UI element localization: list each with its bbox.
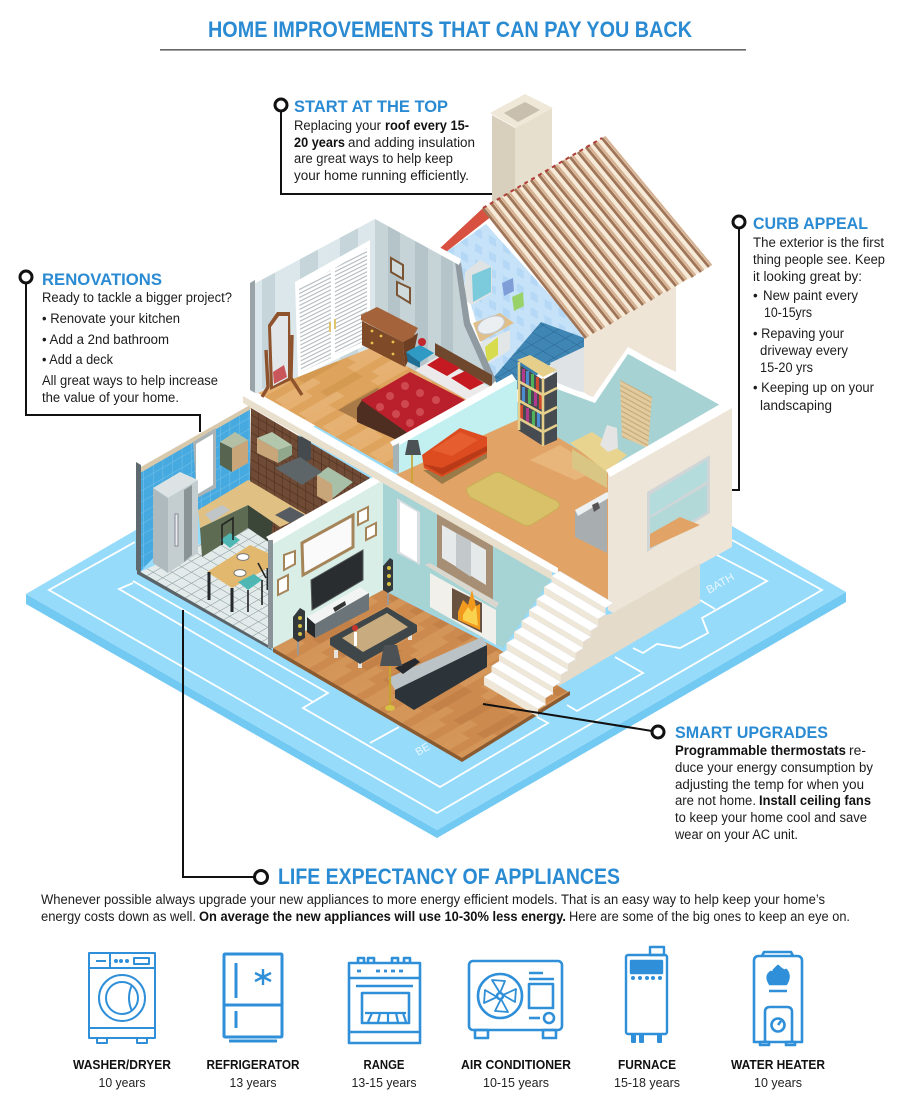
appliance: washer/dryer xyxy=(73,953,171,1090)
lower wall under upper floor xyxy=(530,563,700,700)
intro paragraph: energy costs down as well. xyxy=(41,909,196,924)
living walls xyxy=(380,478,552,648)
callout: curb appeal: thing people see. Keep xyxy=(753,252,885,267)
callout: smart upgrades xyxy=(483,704,873,842)
fridge xyxy=(153,472,198,573)
callout: renovations xyxy=(20,270,232,432)
sofa xyxy=(388,637,487,710)
appliance: water heater: 10 years xyxy=(754,1076,802,1090)
appliance: air conditioner: AIR CONDITIONER xyxy=(461,1058,571,1072)
callout: curb appeal: The exterior is the first xyxy=(753,235,884,250)
bedroom floor xyxy=(258,347,493,472)
red gable xyxy=(438,208,492,252)
blueprint slab xyxy=(26,355,846,838)
dresser xyxy=(361,307,418,367)
icon: range xyxy=(349,958,420,1043)
icon: washer xyxy=(89,953,155,1043)
exterior wall xyxy=(606,403,734,613)
appliance: range: 13-15 years xyxy=(352,1076,416,1090)
nightstand xyxy=(406,338,434,368)
callout: curb appeal: 15-20 yrs xyxy=(760,360,813,375)
appliance: refrigerator xyxy=(206,954,300,1090)
cream dresser xyxy=(570,425,627,488)
icon: water heater xyxy=(754,952,802,1045)
section heading: life expectancy: LIFE EXPECTANCY OF APPLIANCES xyxy=(278,864,620,889)
chimney xyxy=(490,94,553,215)
callout: curb appeal: CURB APPEAL xyxy=(753,214,868,233)
blueprint slab: BATH xyxy=(704,571,737,597)
roof xyxy=(483,136,711,338)
TV stand xyxy=(307,587,369,638)
window blind xyxy=(620,380,652,448)
callout: start at the top: your home running efficiently. xyxy=(294,168,469,183)
floor lamp xyxy=(405,440,421,483)
section heading: life expectancy xyxy=(183,610,620,889)
callout: start at the top: 20 years xyxy=(294,135,345,150)
callout: curb appeal: • Repaving your xyxy=(753,326,844,341)
appliance: furnace xyxy=(614,947,680,1090)
icon: refrigerator xyxy=(224,954,282,1041)
callout: start at the top xyxy=(275,97,492,194)
appliance: refrigerator: 13 years xyxy=(230,1076,276,1090)
red sofa xyxy=(422,428,487,484)
callout: smart upgrades: re- xyxy=(849,743,866,758)
bathroom xyxy=(446,224,590,395)
dining table xyxy=(207,518,268,612)
appliance: range xyxy=(349,958,420,1090)
lamp xyxy=(380,645,402,711)
intro paragraph xyxy=(41,892,850,924)
mirror xyxy=(262,312,302,397)
callout: renovations: RENOVATIONS xyxy=(42,270,162,289)
callout: start at the top: START AT THE TOP xyxy=(294,97,448,116)
callout: curb appeal: • xyxy=(753,288,758,303)
appliance: washer/dryer: 10 years xyxy=(98,1076,146,1090)
callout: renovations: • Renovate your kitchen xyxy=(42,311,180,326)
appliance: washer/dryer: WASHER/DRYER xyxy=(73,1058,171,1072)
TV xyxy=(311,550,363,612)
wall art xyxy=(278,507,376,595)
yellow rug xyxy=(466,472,560,526)
callout: start at the top: are great ways to help keep xyxy=(294,151,453,166)
callout: smart upgrades: Programmable thermostats xyxy=(675,743,846,758)
callout: smart upgrades: duce your energy consumption by xyxy=(675,760,873,775)
wall cabinet xyxy=(220,432,248,472)
callout: start at the top: Replacing your xyxy=(294,118,381,133)
kitchen window xyxy=(193,428,216,498)
callout: curb appeal: 10-15yrs xyxy=(764,305,812,320)
callout: curb appeal: it looking great by: xyxy=(753,269,862,284)
staircase xyxy=(484,571,614,717)
callout: curb appeal: driveway every xyxy=(760,343,848,358)
closet xyxy=(295,240,370,378)
callout: curb appeal: New paint every xyxy=(763,288,858,303)
callout: renovations: All great ways to help increase xyxy=(42,373,218,388)
intro paragraph: On average the new appliances will use 10-30% less energy. xyxy=(199,909,566,924)
appliance: furnace: 15-18 years xyxy=(614,1076,680,1090)
callout: start at the top: roof every 15- xyxy=(385,118,469,133)
appliance: refrigerator: REFRIGERATOR xyxy=(206,1058,300,1072)
counter xyxy=(198,480,307,557)
callout: renovations: Ready to tackle a bigger project? xyxy=(42,290,232,305)
intro paragraph: Whenever possible always upgrade your new appliances to more energy efficient models. That is an easy way to help keep your home’s xyxy=(41,892,825,907)
appliance: air conditioner: 10-15 years xyxy=(483,1076,549,1090)
kitchen xyxy=(136,396,370,651)
ground floor living room xyxy=(266,474,570,762)
callout: smart upgrades: wear on your AC unit. xyxy=(674,827,798,842)
bed xyxy=(357,343,492,440)
blueprint slab: BE xyxy=(414,741,432,759)
range hood xyxy=(275,435,322,485)
fireplace xyxy=(425,563,499,645)
callout: smart upgrades: Install ceiling fans xyxy=(759,793,871,808)
counter xyxy=(575,492,612,553)
appliance: water heater: WATER HEATER xyxy=(731,1058,825,1072)
bookshelf xyxy=(517,355,557,446)
callout: smart upgrades: are not home. xyxy=(675,793,756,808)
floor beam xyxy=(243,390,558,580)
icon: furnace xyxy=(626,947,667,1043)
callout: start at the top: and adding insulation xyxy=(348,135,475,150)
tile floor xyxy=(140,528,268,645)
coffee table xyxy=(330,607,417,668)
upper living room xyxy=(390,347,734,613)
callout: smart upgrades: to keep your home cool and save xyxy=(675,810,867,825)
window xyxy=(397,498,420,565)
appliance: range: RANGE xyxy=(364,1058,404,1072)
callout: smart upgrades: SMART UPGRADES xyxy=(675,723,828,742)
wood floor xyxy=(273,590,570,760)
callout: renovations: the value of your home. xyxy=(42,390,179,405)
living floor xyxy=(393,420,612,603)
intro paragraph: Here are some of the big ones to keep an eye on. xyxy=(569,909,850,924)
appliance: furnace: FURNACE xyxy=(618,1058,676,1072)
callout: renovations: • Add a 2nd bathroom xyxy=(42,332,169,347)
bedroom xyxy=(246,212,496,472)
appliance: water heater xyxy=(731,952,825,1090)
cream gable wall xyxy=(584,285,676,399)
callout: curb appeal: landscaping xyxy=(760,398,832,413)
appliance: air conditioner xyxy=(461,961,571,1090)
callout: smart upgrades: adjusting the temp for when you xyxy=(675,777,864,792)
title: HOME IMPROVEMENTS THAT CAN PAY YOU BACK xyxy=(208,17,692,42)
house illustration xyxy=(26,94,846,838)
picture frames xyxy=(391,258,410,303)
upper cabinets xyxy=(257,432,353,505)
callout: curb appeal xyxy=(732,214,885,490)
chimney breast xyxy=(437,508,493,600)
speakers xyxy=(293,558,393,655)
callout: curb appeal: • Keeping up on your xyxy=(753,380,874,395)
icon: air conditioner xyxy=(469,961,562,1038)
callout: renovations: • Add a deck xyxy=(42,352,113,367)
